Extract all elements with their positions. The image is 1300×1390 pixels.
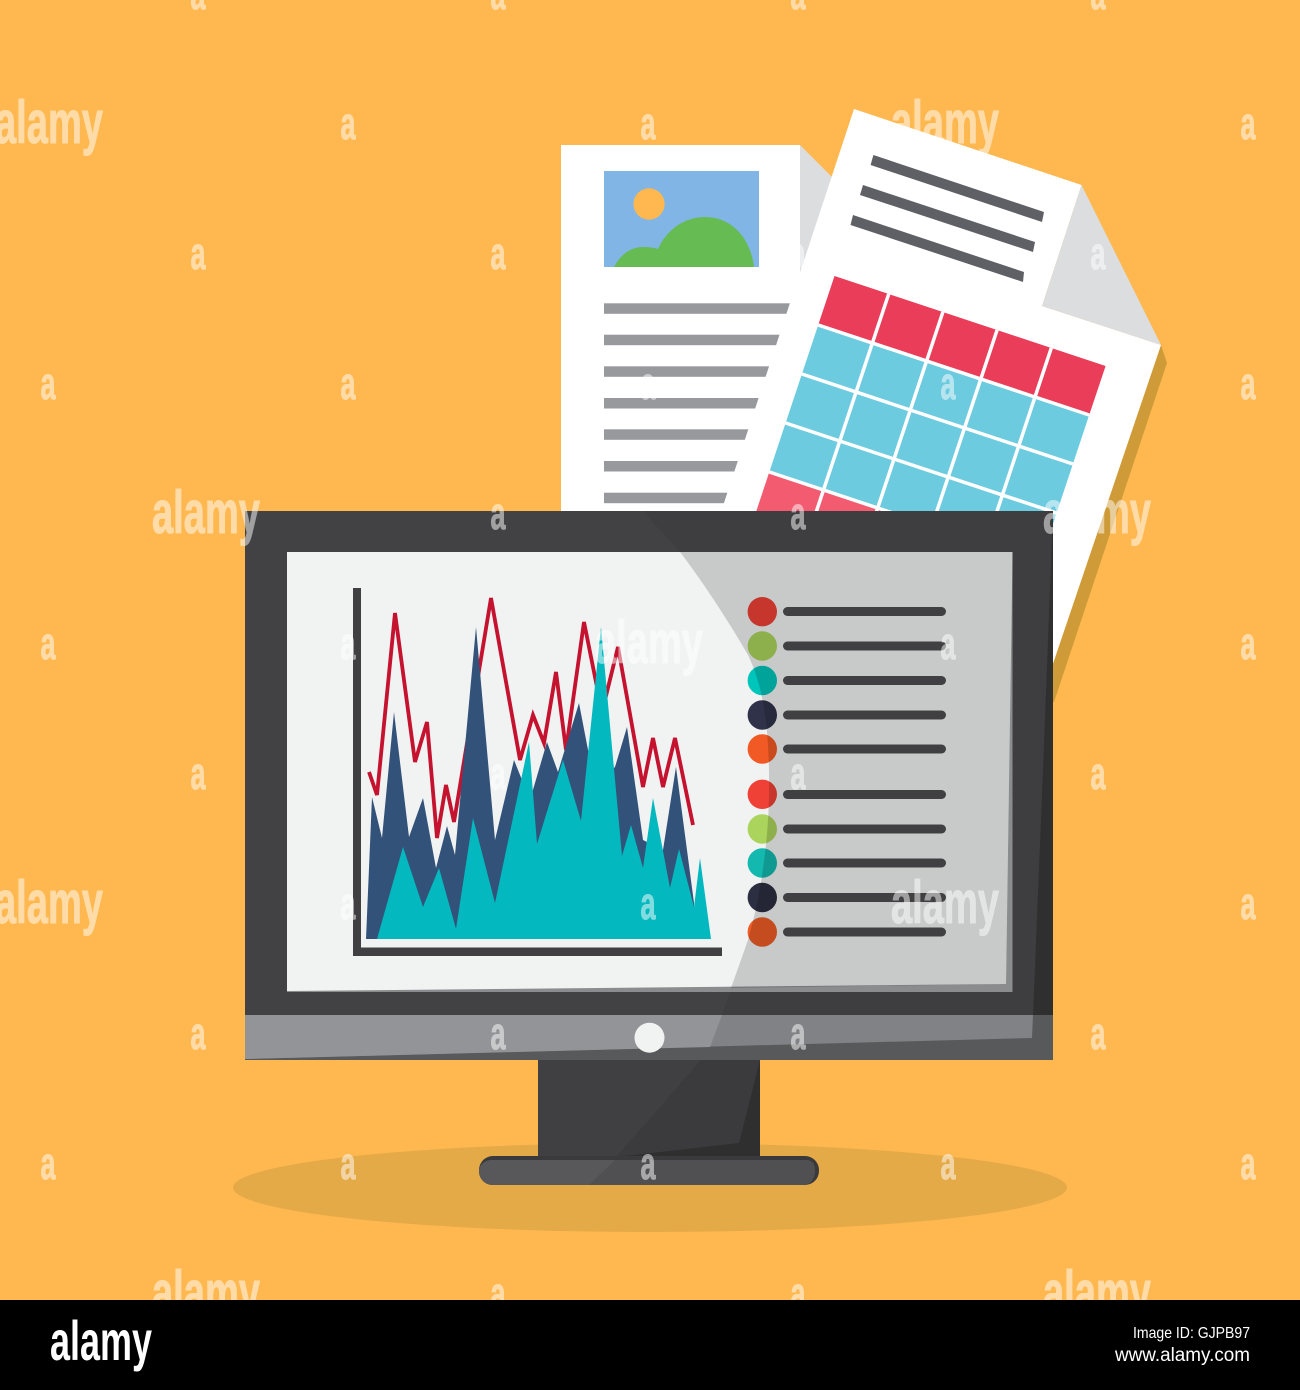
watermarks: alamy	[1043, 479, 1151, 546]
watermarks: a	[640, 878, 656, 929]
legend dots	[748, 597, 777, 947]
watermarks: a	[1090, 1008, 1106, 1059]
watermarks: alamy	[152, 1259, 260, 1326]
text lines	[604, 303, 794, 503]
image id: Image ID: GJPB97	[1133, 1325, 1250, 1342]
watermarks: alamy	[152, 479, 260, 546]
page sheet	[561, 145, 800, 515]
watermarks: a	[790, 1268, 806, 1319]
watermarks: a	[340, 98, 356, 149]
watermarks: a	[1240, 878, 1256, 929]
watermarks: a	[490, 228, 506, 279]
watermarks: a	[40, 618, 56, 669]
watermarks: a	[40, 358, 56, 409]
screen glare	[680, 552, 1012, 988]
ground shadow	[233, 1143, 1067, 1232]
watermarks: a	[490, 748, 506, 799]
watermarks: a	[790, 748, 806, 799]
monitor bezel	[245, 511, 1053, 1016]
watermarks: a	[1240, 618, 1256, 669]
watermarks: alamy	[891, 869, 999, 936]
screen	[287, 552, 1012, 992]
watermarks: a	[190, 1008, 206, 1059]
legend lines	[783, 607, 946, 936]
watermarks: a	[940, 1138, 956, 1189]
area and line chart	[353, 588, 722, 956]
watermarks: a	[790, 488, 806, 539]
icon: landscape picture	[604, 171, 759, 267]
watermarks: a	[1090, 748, 1106, 799]
watermarks: a	[1240, 358, 1256, 409]
watermarks: a	[190, 748, 206, 799]
document: photo and text page	[561, 145, 832, 515]
legend	[748, 597, 946, 947]
monitor base	[479, 1156, 819, 1185]
monitor	[245, 511, 1053, 1185]
chart axes	[353, 588, 722, 956]
watermarks: a	[490, 488, 506, 539]
watermarks: alamy	[595, 609, 703, 676]
watermarks: a	[340, 358, 356, 409]
website: www.alamy.com	[1114, 1345, 1250, 1366]
footer band	[0, 1300, 1300, 1390]
watermarks: a	[490, 1008, 506, 1059]
watermarks: alamy	[0, 89, 103, 156]
page shadow	[1040, 345, 1167, 702]
table	[753, 276, 1106, 611]
monitor stand	[538, 1058, 760, 1158]
watermarks: a	[940, 618, 956, 669]
watermarks: a	[490, 1268, 506, 1319]
page fold	[1042, 185, 1161, 345]
watermarks: a	[940, 358, 956, 409]
watermarks: a	[640, 1138, 656, 1189]
watermarks: a	[640, 98, 656, 149]
watermarks: alamy	[891, 89, 999, 156]
watermarks: a	[190, 228, 206, 279]
watermarks: a	[1240, 98, 1256, 149]
power button	[634, 1023, 664, 1053]
watermarks: alamy	[0, 869, 103, 936]
watermarks: a	[340, 618, 356, 669]
watermarks: a	[340, 1138, 356, 1189]
page sheet	[720, 109, 1161, 702]
heading lines	[850, 155, 1044, 282]
page fold	[800, 145, 832, 275]
watermarks: a	[1240, 1138, 1256, 1189]
watermarks: a	[790, 228, 806, 279]
watermarks: a	[790, 1008, 806, 1059]
red line series	[369, 598, 693, 838]
document: table page	[720, 109, 1167, 702]
watermarks: alamy	[1043, 1259, 1151, 1326]
navy area series	[366, 627, 694, 939]
watermarks: a	[40, 1138, 56, 1189]
watermarks: a	[640, 358, 656, 409]
footer logo: alamy	[50, 1309, 152, 1372]
monitor chin	[245, 1015, 1053, 1060]
watermarks: a	[1090, 228, 1106, 279]
watermarks: a	[340, 878, 356, 929]
teal area series	[377, 627, 711, 939]
